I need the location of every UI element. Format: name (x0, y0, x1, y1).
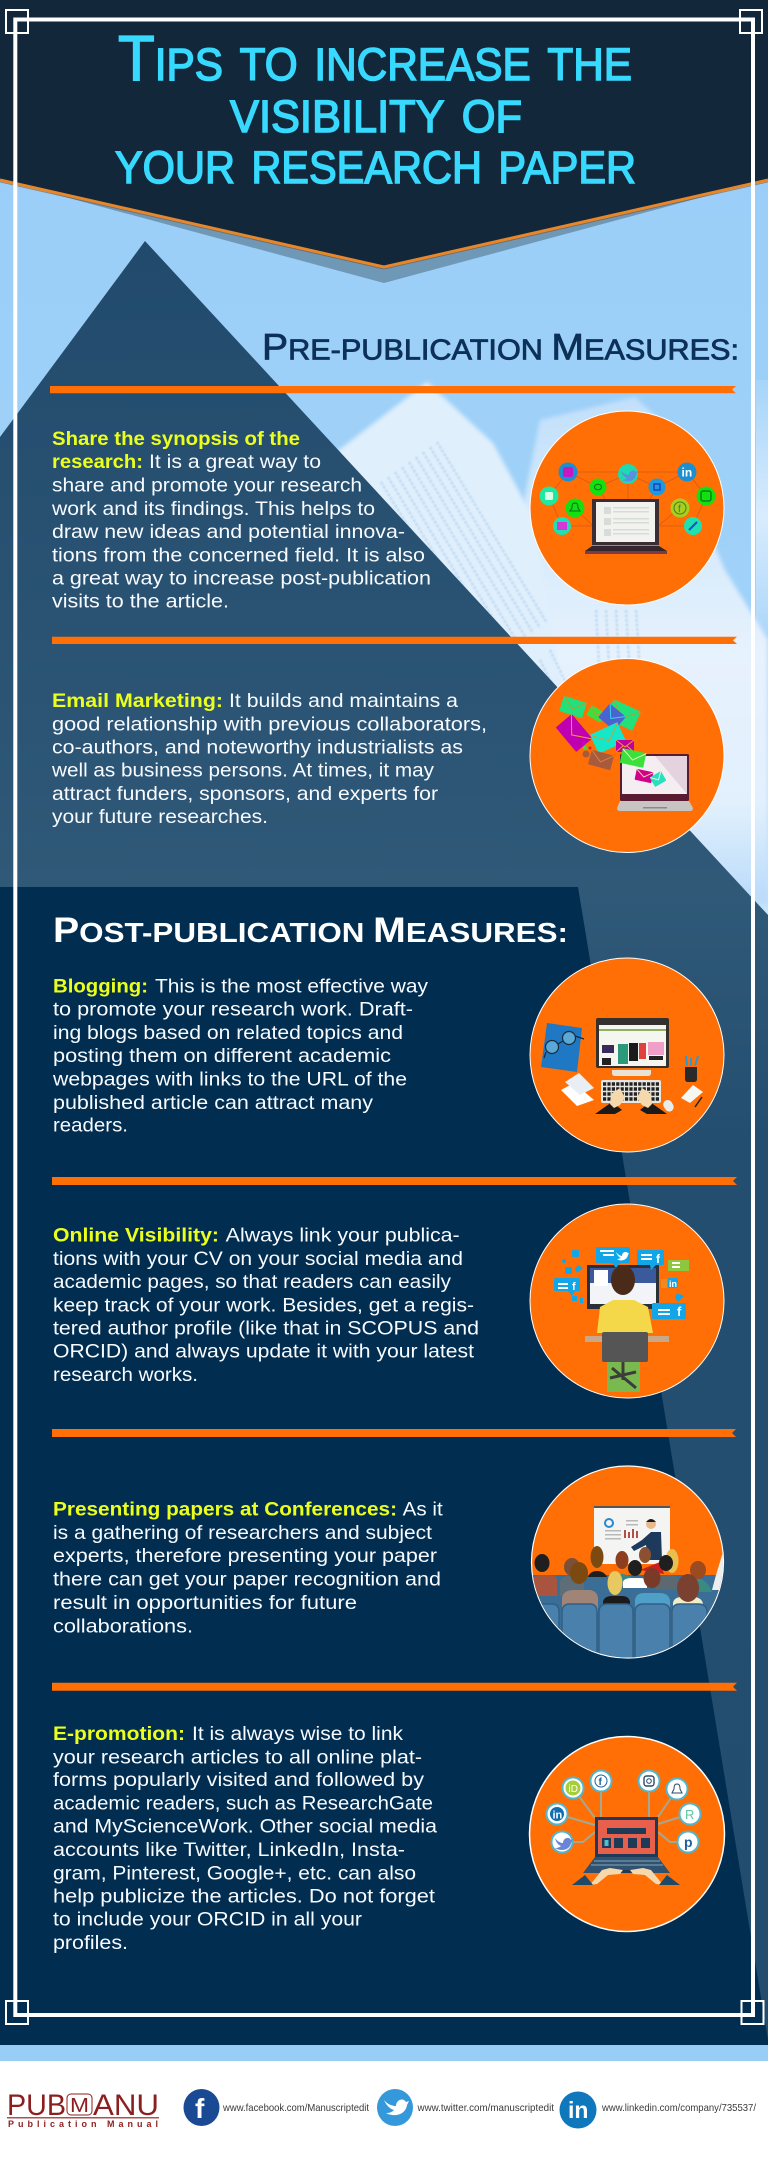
text: blogging: readers. (53, 1115, 128, 1137)
footer: facebook link (184, 2089, 369, 2126)
text: online visibility: tered author profile (like that in SCOPUS and (53, 1318, 479, 1340)
text: online visibility: tions with your CV on your social media and (53, 1248, 463, 1270)
text: blogging: published article can attract many (53, 1092, 373, 1114)
title (115, 22, 636, 197)
text: share the synopsis (51, 428, 431, 612)
footer: linkedin link (560, 2092, 756, 2128)
text: blogging: ing blogs based on related topics and (53, 1022, 403, 1044)
text: email marketing (51, 690, 487, 828)
footer: twitter link (377, 2089, 554, 2126)
footer logo: PUB (7, 2089, 66, 2122)
text: email marketing: attract funders, sponsors, and experts for (52, 783, 439, 805)
text: presenting papers: Presenting papers at Conferences: (53, 1499, 397, 1521)
footer logo (7, 2089, 159, 2129)
text: presenting papers: experts, therefore presenting your paper (53, 1545, 438, 1567)
icon: laptop with academic network nodes: R (685, 1807, 694, 1822)
text: online visibility: academic pages, so that readers can easily (53, 1271, 451, 1293)
text: share the synopsis: research: (52, 451, 143, 473)
text: e-promotion: gram, Pinterest, Google+, etc. can also (53, 1862, 416, 1884)
text: online visibility (53, 1225, 479, 1386)
text: email marketing: Email Marketing: (52, 690, 223, 712)
text: e-promotion: your research articles to all online plat- (53, 1746, 422, 1768)
text: e-promotion: It is always wise to link (192, 1723, 403, 1745)
text: e-promotion: and MyScienceWork. Other social media (53, 1816, 437, 1838)
text: email marketing: good relationship with previous collaborators, (52, 713, 487, 735)
text: e-promotion: help publicize the articles. Do not forget (53, 1886, 436, 1908)
header banner (0, 0, 768, 283)
text: blogging: webpages with links to the URL of the (52, 1069, 407, 1091)
text: presenting papers: is a gathering of researchers and subject (53, 1522, 433, 1544)
text: blogging: to promote your research work. Draft- (53, 999, 413, 1021)
text: share the synopsis: Share the synopsis of the (52, 428, 300, 450)
text: online visibility: keep track of your work. Besides, get a regis- (53, 1295, 474, 1317)
text: share the synopsis: work and its findings. This helps to (51, 498, 375, 520)
icon: emails flying to laptop (530, 658, 724, 852)
divider 1 (50, 386, 736, 393)
text: share the synopsis: share and promote your research (52, 474, 362, 496)
footer light blue band (0, 2045, 768, 2061)
text: e-promotion: to include your ORCID in all your (53, 1909, 363, 1931)
icon: desk with computer and glasses (530, 958, 724, 1152)
text: email marketing: your future researches. (52, 806, 268, 828)
text: email marketing: It builds and maintains a (229, 690, 458, 712)
divider 2 (52, 637, 737, 644)
text: email marketing: co-authors, and noteworthy industrialists as (52, 736, 463, 758)
heading: pre-publication measures: PRE-PUBLICATION MEASURES: (262, 326, 739, 368)
text: e-promotion: profiles. (53, 1932, 128, 1954)
icon: person at computer with social bubbles: f (677, 1304, 682, 1319)
icon: person at computer with social bubbles: f (572, 1281, 576, 1293)
footer white area (0, 2061, 768, 2158)
text: share the synopsis: a great way to increase post-publication (52, 568, 431, 590)
icon: laptop with social network: in (682, 466, 692, 480)
text: blogging: This is the most effective way (155, 975, 428, 997)
icon: person at computer with social bubbles: f (656, 1252, 661, 1266)
background: dark navy panel (0, 887, 768, 2045)
text: share the synopsis: tions from the concerned field. It is also (52, 544, 425, 566)
icon: laptop with social network (530, 411, 724, 605)
text: e-promotion: E-promotion: (53, 1723, 185, 1745)
text: online visibility: research works. (53, 1364, 198, 1386)
title: visibility of (230, 74, 522, 146)
text: share the synopsis: visits to the article. (52, 590, 229, 612)
footer: facebook link: f (195, 2093, 205, 2124)
icon: conference audience (530, 1466, 725, 1665)
text: presenting papers: result in opportunities for future (53, 1592, 357, 1614)
icon: laptop with academic network nodes: iD (568, 1784, 578, 1795)
title: your research paper (115, 125, 636, 197)
text: email marketing: well as business persons. At times, it may (51, 760, 434, 782)
text: presenting papers: collaborations. (53, 1615, 193, 1637)
heading: post-publication measures: POST-PUBLICATION MEASURES: (53, 911, 568, 950)
icon: person at computer with social bubbles: in (669, 1279, 677, 1289)
icon: laptop with social network: f (678, 504, 681, 515)
divider 3 (52, 1177, 737, 1185)
footer: facebook link: www.facebook.com/Manuscriptedit (222, 2102, 369, 2114)
footer: twitter link: www.twitter.com/manuscriptedit (417, 2102, 554, 2114)
text: presenting papers: As it (403, 1499, 443, 1521)
text: blogging: posting them on different academic (53, 1045, 391, 1067)
text: blogging: Blogging: (53, 975, 148, 997)
title: Tips to increase the (118, 22, 632, 94)
text: e-promotion: accounts like Twitter, LinkedIn, Insta- (53, 1839, 405, 1861)
text: presenting papers: there can get your paper recognition and (53, 1569, 441, 1591)
text: online visibility: Always link your publica- (226, 1225, 460, 1247)
icon: laptop with academic network nodes: f (598, 1777, 602, 1788)
text: presenting papers (53, 1499, 443, 1637)
text: blogging (52, 975, 428, 1137)
text: e-promotion (53, 1723, 437, 1954)
text: e-promotion: academic readers, such as ResearchGate (53, 1792, 433, 1814)
footer: linkedin link: in (568, 2097, 588, 2123)
text: e-promotion: forms popularly visited and followed by (53, 1769, 424, 1791)
text: share the synopsis: draw new ideas and potential innova- (52, 521, 405, 543)
icon: person at computer with social bubbles (530, 1204, 724, 1398)
icon: laptop with academic network nodes: in (552, 1810, 563, 1822)
text: share the synopsis: It is a great way to (149, 451, 321, 473)
text: online visibility: Online Visibility: (53, 1225, 219, 1247)
divider 4 (52, 1429, 736, 1437)
footer logo: M (70, 2095, 89, 2117)
text: online visibility: ORCID) and always update it with your latest (53, 1341, 475, 1363)
footer: linkedin link: www.linkedin.com/company/735537/ (601, 2102, 756, 2114)
footer logo: ANU (93, 2089, 159, 2122)
divider 5 (52, 1683, 737, 1691)
footer logo: Publication Manual (8, 2119, 158, 2129)
icon: laptop with academic network nodes: p (684, 1834, 693, 1850)
icon: laptop with academic network nodes (530, 1736, 724, 1932)
